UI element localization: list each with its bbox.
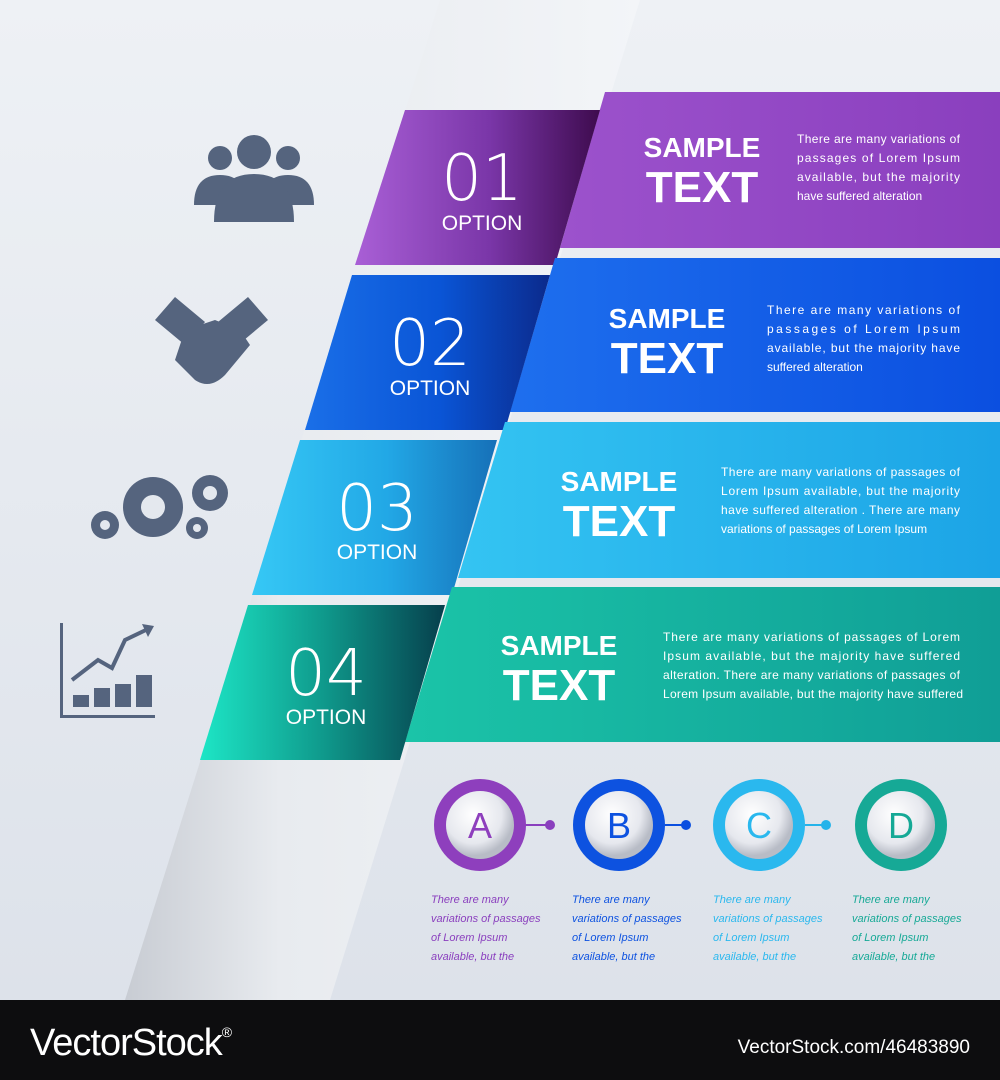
captions: available, but the [713,951,796,963]
footer bar: VectorStock.com/46483890 [738,1037,970,1058]
option band 2: SAMPLE [609,303,725,334]
circle C: C [746,805,772,846]
option band 3: OPTION [337,541,417,564]
option band 3: TEXT [563,497,675,546]
captions: of Lorem Ipsum [572,932,648,944]
option band 2: passages of Lorem Ipsum [767,322,960,336]
option band 1: have suffered alteration [797,189,922,203]
footer bar [0,1000,1000,1080]
option band 3: Lorem Ipsum available, but the majority [721,484,960,498]
circle C [713,779,831,871]
captions: available, but the [852,951,935,963]
option band 4: 04 [285,637,367,711]
option band 2: OPTION [390,377,470,400]
option band 1 [355,92,1000,265]
option band 1: There are many variations of [797,132,961,146]
option band 4: Ipsum available, but the majority have suffered [663,649,960,663]
option band 3: have suffered alteration . There are many [721,503,960,517]
option band 2: available, but the majority have [767,341,960,355]
circle A: A [468,805,492,846]
captions: variations of passages [713,913,823,925]
captions: variations of passages [431,913,541,925]
option band 4: Lorem Ipsum available, but the majority have suffered [663,687,963,701]
option band 1: 01 [441,142,523,216]
icon: gears [91,475,228,539]
captions: of Lorem Ipsum [713,932,789,944]
diagonal strip [125,0,640,1000]
option band 2 [305,258,1000,430]
captions: There are many [572,894,651,906]
circle A [434,779,555,871]
circle D: D [888,805,914,846]
option band 2: There are many variations of [767,303,961,317]
option band 4: TEXT [503,661,615,710]
icon: handshake [155,297,268,384]
option band 1: OPTION [442,212,522,235]
option band 1: SAMPLE [644,132,760,163]
captions: available, but the [431,951,514,963]
option band 4 [200,587,1000,760]
footer bar: ® [222,1024,233,1040]
option band 1: passages of Lorem Ipsum [797,151,960,165]
option band 2: TEXT [611,334,723,383]
captions [431,894,962,963]
footer bar: VectorStock [30,1022,222,1064]
captions: of Lorem Ipsum [431,932,507,944]
captions: available, but the [572,951,655,963]
captions: There are many [713,894,792,906]
option band 4: SAMPLE [501,630,617,661]
option band 4: alteration. There are many variations of passages of [663,668,961,682]
option band 1: TEXT [646,163,758,212]
circle B: B [607,805,631,846]
captions: variations of passages [852,913,962,925]
option band 2: suffered alteration [767,360,863,374]
captions: of Lorem Ipsum [852,932,928,944]
option band 3: 03 [336,472,418,546]
option band 4: OPTION [286,706,366,729]
option band 3: SAMPLE [561,466,677,497]
captions: There are many [852,894,931,906]
option band 1: available, but the majority [797,170,960,184]
option band 3 [252,422,1000,595]
captions: There are many [431,894,510,906]
icon: people [194,135,314,222]
circle D [855,779,947,871]
option band 2: 02 [389,307,471,381]
option band 4: There are many variations of passages of Lorem [663,630,960,644]
captions: variations of passages [572,913,682,925]
option band 3: variations of passages of Lorem Ipsum [721,522,927,536]
icon: chart [60,623,155,718]
circle B [573,779,691,871]
option band 3: There are many variations of passages of [721,465,961,479]
